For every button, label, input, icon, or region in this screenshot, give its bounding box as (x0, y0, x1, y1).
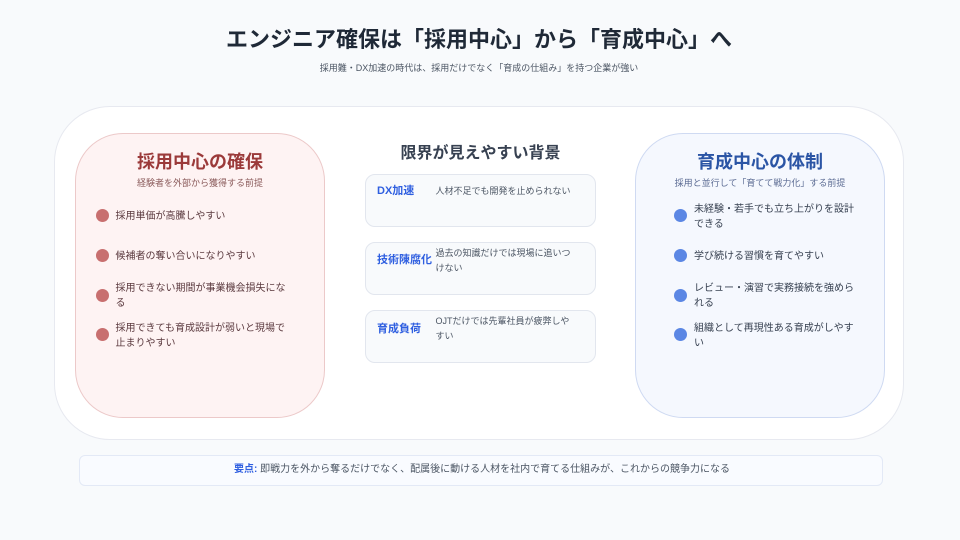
card text: DX: 人材不足でも開発を止められない (436, 186, 571, 196)
bullet text 2: 学び続ける習慣を育てやすい (694, 251, 824, 262)
card: obsolescence (365, 242, 596, 295)
subheading: training-centered: 採用と並行して「育てて戦力化」する前提 (675, 178, 845, 188)
key takeaway bar (79, 455, 883, 486)
card: DX (365, 174, 596, 227)
bullet text 4: 組織として再現性ある育成がしやすい (694, 323, 854, 349)
card text: obsolescence: 過去の知識だけでは現場に追いつけない (436, 248, 571, 273)
title: エンジニア確保は「採用中心」から「育成中心」へ (226, 27, 732, 52)
card label: DX: DX加速 (377, 185, 414, 197)
panel: training-centered (635, 133, 885, 418)
card label: obsolescence: 技術陳腐化 (377, 254, 432, 266)
bullet icon 1 (674, 209, 687, 222)
bullet text 3: レビュー・演習で実務接続を強められる (694, 283, 854, 309)
bullet text 3: 採用できない期間が事業機会損失になる (116, 283, 286, 309)
bullet text 4: 採用できても育成設計が弱いと現場で止まりやすい (116, 323, 285, 349)
bullet icon 1 (96, 209, 109, 222)
center heading: 限界が見えやすい背景 (400, 145, 560, 162)
bullet icon 2 (96, 249, 109, 262)
bullet icon 3 (674, 289, 687, 302)
subtitle: 採用難・DX加速の時代は、採用だけでなく「育成の仕組み」を持つ企業が強い (320, 63, 638, 73)
bullet text 1: 採用単価が高騰しやすい (116, 211, 225, 222)
bullet icon 2 (674, 249, 687, 262)
card: training load (365, 310, 596, 363)
bullet text 1: 未経験・若手でも立ち上がりを設計できる (694, 204, 854, 230)
main container panel (54, 106, 904, 440)
heading: training-centered: 育成中心の体制 (697, 152, 823, 172)
panel: hiring-centered (75, 133, 325, 418)
card text: training load: OJTだけでは先輩社員が疲弊しやすい (436, 316, 569, 341)
bullet icon 4 (96, 328, 109, 341)
key takeaway text: 要点: 即戦力を外から奪るだけでなく、配属後に動ける人材を社内で育てる仕組みが、これからの競争力になる (234, 464, 730, 475)
bullet icon 3 (96, 289, 109, 302)
subheading: hiring-centered: 経験者を外部から獲得する前提 (137, 178, 263, 188)
heading: hiring-centered: 採用中心の確保 (137, 152, 263, 172)
bullet icon 4 (674, 328, 687, 341)
card label: training load: 育成負荷 (377, 323, 421, 335)
bullet text 2: 候補者の奪い合いになりやすい (116, 251, 256, 262)
